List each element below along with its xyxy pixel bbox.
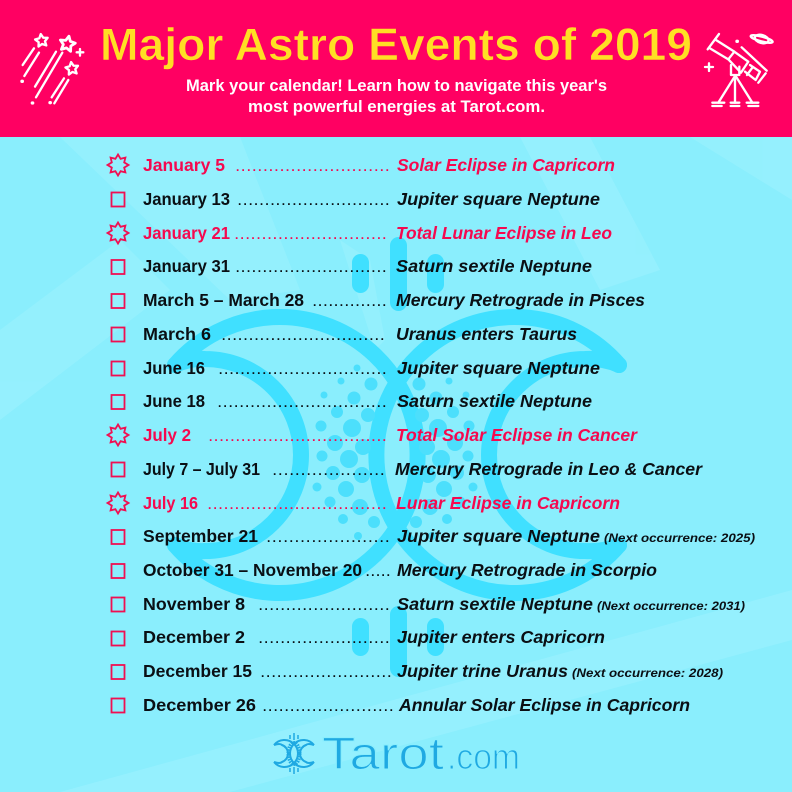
row: June 18: Saturn sextile Neptune: [397, 391, 592, 411]
row: January 5: January 5: [143, 155, 225, 175]
row: January 31: ............................: [236, 261, 386, 275]
row: July 2: Total Solar Eclipse in Cancer: [396, 425, 638, 445]
subtitle: most powerful energies at Tarot.com.: [248, 98, 545, 116]
row: March 6: [112, 324, 577, 344]
row: October 31: .....: [366, 565, 390, 579]
row: March 5: March 5 – March 28: [143, 290, 304, 310]
row: June 16: ...............................: [219, 363, 386, 377]
row: January 5: Solar Eclipse in Capricorn: [397, 155, 615, 175]
row: November 8: (Next occurrence: 2031): [597, 599, 745, 613]
row: December 2: December 2: [143, 627, 245, 647]
row: March 5: Mercury Retrograde in Pisces: [396, 290, 645, 310]
wordmark: Tarot: [322, 728, 445, 779]
row: September 21: (Next occurrence: 2025): [604, 531, 755, 545]
icon: shooting stars: [22, 33, 83, 103]
row: June 18: ...............................: [218, 396, 386, 410]
event list: [108, 154, 755, 715]
wordmark: .com: [447, 736, 520, 777]
row: June 18: [112, 391, 592, 411]
row: July 7: ....................: [273, 464, 384, 478]
row: December 15: Jupiter trine Uranus: [397, 661, 568, 681]
row: September 21: [112, 526, 755, 546]
row: December 26: [112, 695, 690, 715]
row: January 5: ............................: [236, 160, 389, 174]
row: January 13: January 13: [143, 189, 230, 209]
row: December 26: December 26: [143, 695, 256, 715]
row: October 31: [112, 560, 657, 580]
right crescent: [376, 317, 619, 593]
bubbles: [312, 364, 478, 540]
row: July 16: .................................: [208, 498, 386, 512]
row: July 16: July 16: [143, 493, 198, 513]
title: Major Astro Events of 2019: [100, 19, 692, 70]
row: December 15: (Next occurrence: 2028): [572, 666, 723, 680]
header banner: [0, 0, 792, 137]
row: December 26: ........................: [263, 700, 393, 714]
icon: telescope and planet: [705, 33, 773, 106]
row: July 7: [112, 459, 703, 479]
row: January 13: [112, 189, 600, 209]
row: January 21: January 21: [143, 223, 230, 243]
row: January 5: [108, 154, 615, 176]
row: January 13: ............................: [238, 194, 389, 208]
row: June 18: June 18: [143, 391, 205, 411]
row: June 16: June 16: [143, 358, 205, 378]
row: March 5: [112, 290, 645, 310]
row: November 8: ........................: [259, 599, 389, 613]
subtitle: [186, 77, 607, 116]
row: March 6: ..............................: [222, 329, 384, 343]
row: July 16: Lunar Eclipse in Capricorn: [396, 493, 620, 513]
subtitle: Mark your calendar! Learn how to navigate this year's: [186, 77, 607, 95]
row: December 2: Jupiter enters Capricorn: [397, 627, 605, 647]
row: January 13: Jupiter square Neptune: [397, 189, 600, 209]
row: December 15: [112, 661, 723, 681]
row: July 7: July 7 – July 31: [143, 459, 260, 479]
row: December 2: ........................: [259, 632, 389, 646]
row: March 6: Uranus enters Taurus: [396, 324, 577, 344]
row: January 31: [112, 256, 592, 276]
left crescent: [175, 317, 418, 593]
row: March 5: ..............: [313, 295, 386, 309]
row: March 6: March 6: [143, 324, 211, 344]
row: January 21: Total Lunar Eclipse in Leo: [396, 223, 612, 243]
row: November 8: Saturn sextile Neptune: [397, 594, 593, 614]
row: September 21: Jupiter square Neptune: [397, 526, 600, 546]
row: December 15: ........................: [261, 666, 391, 680]
row: July 2: July 2: [143, 425, 191, 445]
row: December 2: [112, 627, 605, 647]
row: July 2: .................................: [209, 430, 386, 444]
row: September 21: September 21: [143, 526, 258, 546]
moon bars: [352, 237, 444, 677]
row: December 26: Annular Solar Eclipse in Capricorn: [398, 695, 690, 715]
row: November 8: [112, 594, 745, 614]
row: January 31: January 31: [143, 256, 230, 276]
row: January 21: [108, 222, 612, 244]
row: July 2: [108, 424, 638, 446]
row: November 8: November 8: [143, 594, 245, 614]
row: June 16: Jupiter square Neptune: [397, 358, 600, 378]
row: October 31: October 31 – November 20: [143, 560, 362, 580]
icon: triple moon logo: [274, 733, 314, 774]
row: December 15: December 15: [143, 661, 252, 681]
logo: Tarot.com: [274, 728, 520, 779]
row: July 7: Mercury Retrograde in Leo & Cancer: [395, 459, 703, 479]
row: January 31: Saturn sextile Neptune: [396, 256, 592, 276]
row: September 21: ......................: [267, 531, 389, 545]
row: July 16: [108, 492, 620, 514]
row: June 16: [112, 358, 600, 378]
row: January 21: ............................: [235, 228, 386, 242]
background triple moon emblem: [175, 237, 619, 677]
row: October 31: Mercury Retrograde in Scorpio: [397, 560, 657, 580]
